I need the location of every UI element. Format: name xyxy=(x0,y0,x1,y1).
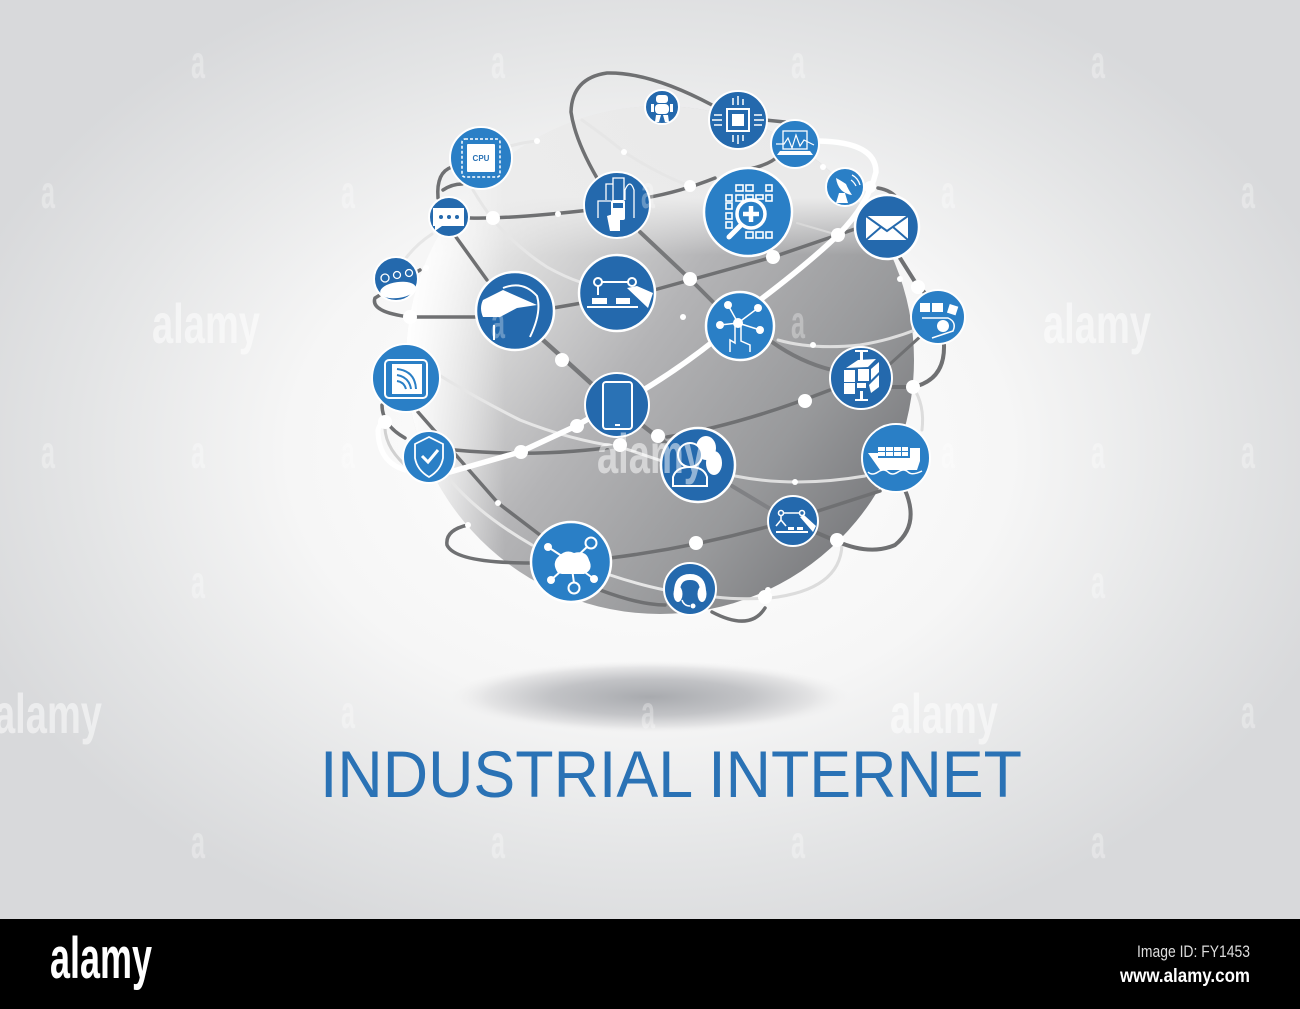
icon: CPU chip: CPU xyxy=(473,154,490,163)
watermark tiles xyxy=(41,36,1255,868)
icon: security shield xyxy=(403,431,455,483)
watermark tiles: a xyxy=(191,816,205,868)
icon: robot arm on rail xyxy=(579,255,655,331)
watermark tiles: a xyxy=(41,166,55,218)
watermark tiles: a xyxy=(1091,556,1105,608)
network lines: white xyxy=(378,141,876,472)
watermark words: alamy xyxy=(152,292,260,355)
watermark tiles: a xyxy=(1241,686,1255,738)
watermark tiles: a xyxy=(1091,36,1105,88)
watermark tiles: a xyxy=(491,36,505,88)
watermark words xyxy=(0,292,1151,745)
network lines: dark xyxy=(374,73,944,621)
watermark tiles: a xyxy=(641,686,655,738)
watermark tiles: a xyxy=(191,36,205,88)
title: INDUSTRIAL INTERNET xyxy=(320,737,1022,811)
watermark tiles: a xyxy=(641,166,655,218)
footer bar: Image ID: FY1453 xyxy=(1137,942,1250,961)
icon: cargo ship xyxy=(862,424,930,492)
footer bar: alamy xyxy=(50,926,152,991)
footer bar xyxy=(0,919,1300,1009)
watermark words: alamy xyxy=(597,422,705,485)
icon: support people xyxy=(661,428,735,502)
icon: robot xyxy=(645,90,679,124)
icon: robot arm small xyxy=(768,496,818,546)
watermark tiles: a xyxy=(791,36,805,88)
icon: touch network xyxy=(706,292,774,360)
icon: satellite dish xyxy=(826,168,864,206)
watermark tiles: a xyxy=(341,426,355,478)
icon: tablet xyxy=(585,373,649,437)
watermark tiles: a xyxy=(941,426,955,478)
watermark tiles: a xyxy=(1241,426,1255,478)
watermark tiles: a xyxy=(341,166,355,218)
icon: processor chip xyxy=(709,91,767,149)
watermark tiles: a xyxy=(41,426,55,478)
watermark tiles: a xyxy=(491,816,505,868)
watermark tiles: a xyxy=(941,166,955,218)
globe shadow xyxy=(450,661,850,733)
icon: VR headset xyxy=(476,272,554,350)
network lines: light xyxy=(385,120,923,599)
icon: magnifier over grid xyxy=(704,168,792,256)
watermark tiles: a xyxy=(1241,166,1255,218)
icon: headset xyxy=(664,563,716,615)
watermark tiles: a xyxy=(791,296,805,348)
watermark tiles: a xyxy=(341,686,355,738)
watermark words: alamy xyxy=(1043,292,1151,355)
icon: warehouse cubes xyxy=(830,347,892,409)
footer bar: www.alamy.com xyxy=(1119,966,1250,987)
icon: RFID tag xyxy=(372,344,440,412)
watermark tiles: a xyxy=(191,556,205,608)
icon: laptop with chart xyxy=(771,120,819,168)
icon: conveyor belt xyxy=(911,290,965,344)
icon: chat bubble xyxy=(429,197,469,237)
icon: team meeting xyxy=(374,257,418,301)
network nodes xyxy=(378,138,925,604)
watermark tiles: a xyxy=(1091,816,1105,868)
icon: smart city on phone xyxy=(584,172,650,238)
icon: cloud network xyxy=(531,522,611,602)
icon: envelope xyxy=(855,195,919,259)
icon: CPU chip xyxy=(450,127,512,189)
watermark tiles: a xyxy=(491,296,505,348)
watermark tiles: a xyxy=(1091,426,1105,478)
globe sphere xyxy=(406,106,914,614)
watermark tiles: a xyxy=(191,426,205,478)
watermark words: alamy xyxy=(890,682,998,745)
watermark tiles: a xyxy=(791,816,805,868)
